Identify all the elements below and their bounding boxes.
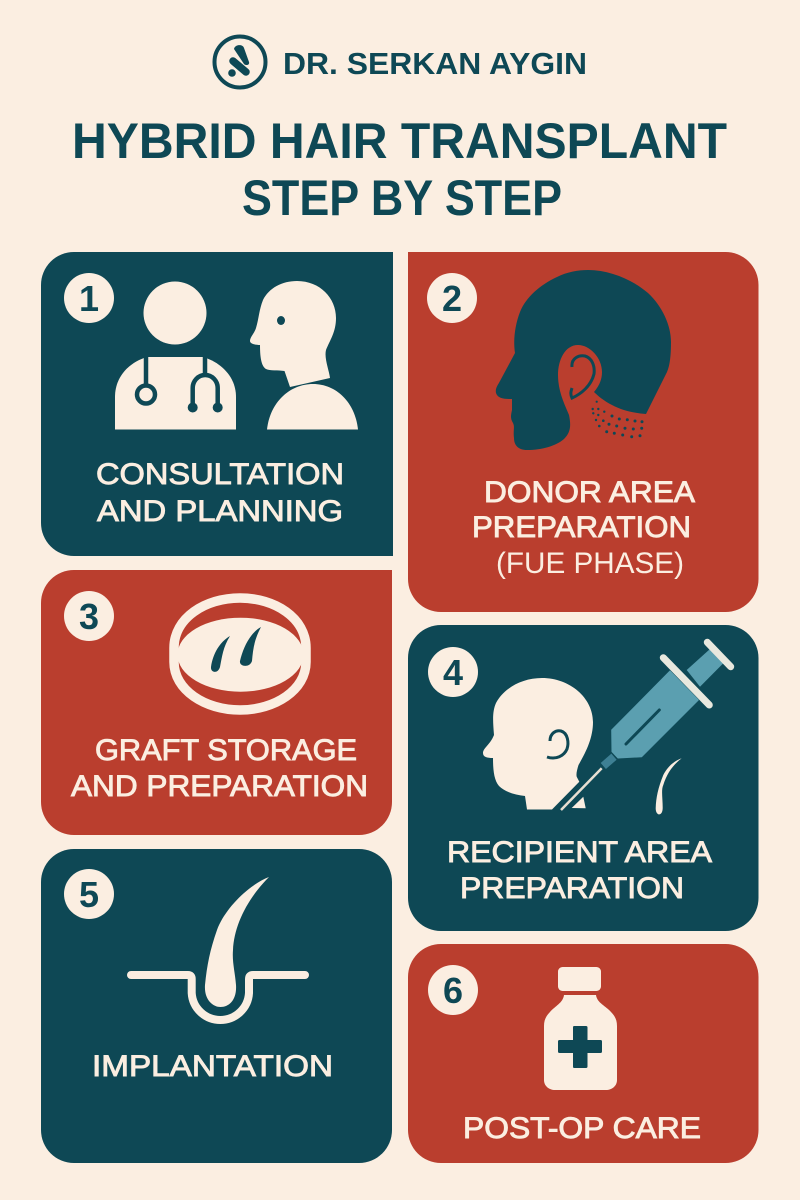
step number 4 [428, 647, 478, 697]
icon: hair strand [656, 758, 682, 814]
step number 2 [427, 273, 477, 323]
label: PREPARATION [460, 872, 684, 905]
label [447, 836, 712, 905]
icon: head with donor area [496, 270, 671, 450]
label: (FUE PHASE) [496, 547, 684, 580]
label: RECIPIENT AREA [447, 836, 712, 869]
panel: step 2 donor area preparation [408, 252, 759, 612]
panel: step 3 graft storage and preparation [41, 570, 392, 835]
step number 3 [64, 591, 114, 641]
label [472, 476, 695, 580]
panel: step 4 recipient area preparation [408, 625, 758, 931]
step number 4: 4 [443, 652, 463, 693]
title: STEP BY STEP [242, 170, 562, 226]
label: CONSULTATION [96, 458, 344, 491]
icon: syringe [561, 642, 731, 810]
label: GRAFT STORAGE [95, 734, 357, 767]
label [71, 734, 368, 803]
step number 5: 5 [79, 874, 99, 915]
label: IMPLANTATION [92, 1050, 333, 1083]
icon: patient head [483, 678, 593, 810]
step number 5 [64, 869, 114, 919]
panel: step 6 post-op care [408, 944, 758, 1163]
icon: petri dish with grafts [174, 598, 306, 710]
label [96, 458, 344, 528]
icon: logo mark [214, 36, 266, 88]
icon: hair follicle [131, 877, 305, 1020]
title: HYBRID HAIR TRANSPLANT [72, 113, 727, 169]
title [72, 113, 727, 226]
icon: medicine bottle [544, 967, 617, 1090]
step number 6: 6 [443, 970, 463, 1011]
panel: step 5 implantation [41, 849, 392, 1163]
label: AND PLANNING [97, 495, 343, 528]
logo [214, 36, 587, 88]
icon: doctor with stethoscope [115, 282, 236, 430]
step number 2: 2 [442, 278, 462, 319]
label: POST-OP CARE [463, 1112, 701, 1145]
label: PREPARATION [472, 511, 691, 544]
panel: step 1 consultation and planning [41, 252, 393, 556]
step number 1 [64, 273, 114, 323]
label: DONOR AREA [484, 476, 695, 509]
step number 3: 3 [79, 596, 99, 637]
step number 1: 1 [79, 278, 99, 319]
logo wordmark: DR. SERKAN AYGIN [283, 46, 587, 81]
label: AND PREPARATION [71, 770, 368, 803]
step number 6 [428, 965, 478, 1015]
icon: patient profile [250, 281, 358, 430]
